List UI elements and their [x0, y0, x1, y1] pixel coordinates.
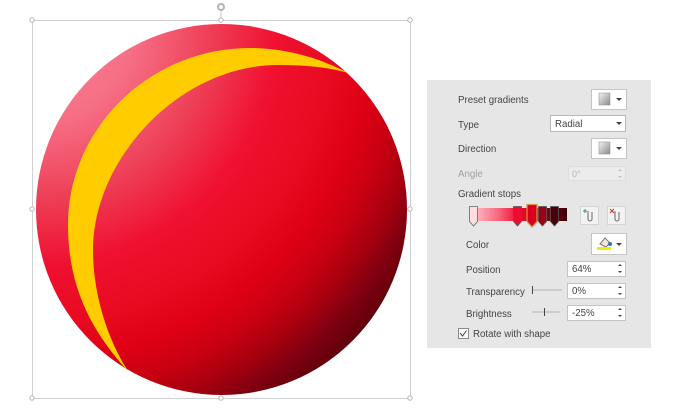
selection frame with handles — [30, 4, 412, 400]
direction button — [592, 138, 626, 158]
label: gradient stops: Gradient stops — [458, 189, 521, 200]
transparency slider — [532, 286, 562, 294]
rotate with shape checkbox: Rotate with shape — [473, 329, 551, 340]
label: transparency: Transparency — [466, 287, 525, 298]
yellow crescent band — [68, 48, 348, 371]
gradient stops bar — [469, 204, 567, 227]
add stop button — [580, 206, 598, 224]
transparency input — [568, 284, 626, 298]
color button — [592, 234, 626, 254]
label: direction: Direction — [458, 144, 496, 155]
label: position: Position — [466, 265, 500, 276]
angle input disabled: 0° — [572, 169, 581, 179]
type dropdown — [550, 116, 626, 132]
transparency input: 0% — [572, 286, 586, 297]
label: brightness: Brightness — [466, 309, 512, 320]
position input — [568, 262, 626, 276]
angle input disabled — [568, 166, 626, 180]
label: angle: Angle — [458, 169, 483, 180]
preset gradients button — [592, 90, 626, 110]
brightness input: -25% — [572, 308, 595, 319]
remove stop button — [608, 206, 626, 224]
brightness slider — [532, 308, 560, 316]
position input: 64% — [572, 264, 592, 275]
brightness input — [568, 306, 626, 320]
label: type: Type — [458, 120, 479, 131]
panel contents softened — [458, 90, 626, 340]
panel: gradient settings — [427, 80, 651, 348]
label: color: Color — [466, 240, 490, 251]
label: preset gradients: Preset gradients — [458, 95, 529, 106]
type dropdown: Radial — [555, 119, 582, 130]
red gradient sphere — [36, 24, 407, 395]
